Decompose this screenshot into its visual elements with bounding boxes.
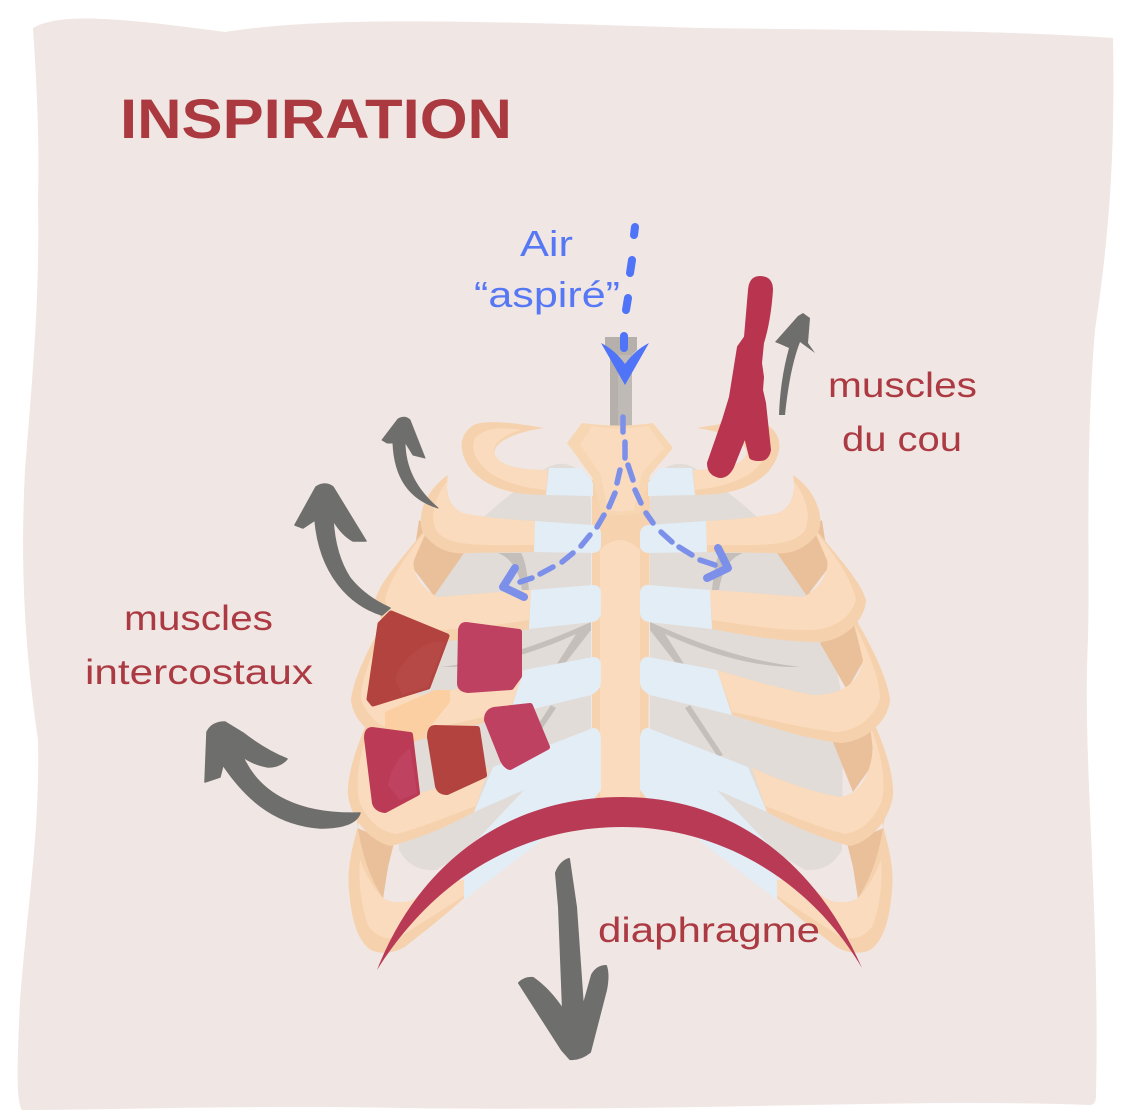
label: muscles du cou: du cou: [842, 420, 962, 459]
label: air aspire: “aspiré”: [474, 274, 620, 315]
arrow: intercostal lower: [205, 722, 360, 828]
diaphragm: [377, 797, 862, 970]
arrow: intercostal upper: [295, 484, 390, 615]
title: INSPIRATION: [120, 87, 512, 150]
label: muscles du cou: muscles: [828, 366, 977, 405]
manubrium: [567, 423, 673, 515]
muscle: intercostal upper right: [460, 625, 519, 690]
arrow: diaphragm down: [519, 859, 608, 1059]
label: muscles intercostaux: muscles: [124, 599, 273, 638]
rib cage right half: [640, 422, 893, 953]
arrow: rib upper: [382, 417, 438, 508]
label: muscles intercostaux: [85, 599, 314, 692]
muscle: intercostal upper left: [369, 613, 447, 704]
muscle: intercostal lower left: [367, 730, 417, 810]
label: diaphragme: diaphragme: [598, 911, 820, 950]
rib cage left half: [348, 422, 601, 953]
orange patch: [385, 690, 450, 752]
muscle: neck: [708, 277, 772, 477]
air arrow: [601, 227, 649, 385]
trachea: [605, 337, 637, 427]
sternum body: [592, 480, 650, 800]
label: muscles intercostaux: intercostaux: [85, 653, 314, 692]
muscle: intercostal lower right: [487, 706, 547, 767]
muscle: intercostal lower middle: [430, 728, 484, 792]
label: muscles du cou: [828, 366, 977, 459]
arrow: neck muscles: [775, 313, 815, 415]
airflow arrow into lungs: [503, 417, 728, 597]
label: air aspire: [474, 223, 620, 315]
label: air aspire: Air: [520, 223, 573, 264]
